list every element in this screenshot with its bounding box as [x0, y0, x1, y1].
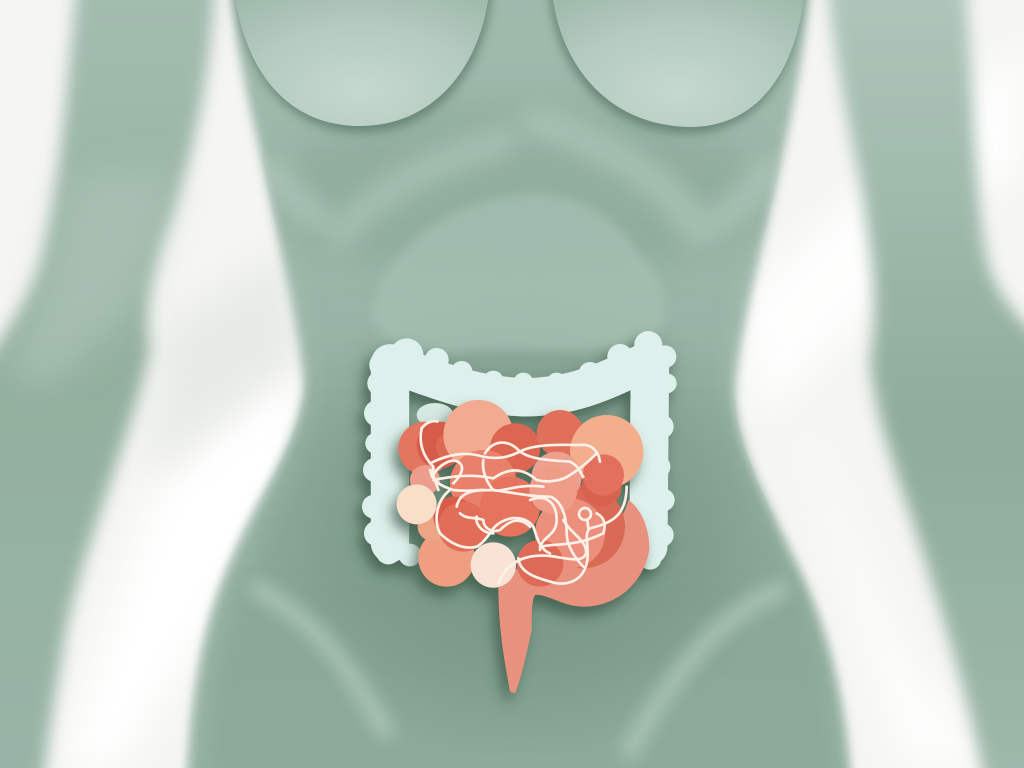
pale loop behind intestine: [417, 403, 453, 427]
left breast: [233, 0, 492, 132]
torso edge shading: [192, 484, 278, 768]
small intestine: organ masses: [397, 400, 649, 693]
torso: [181, 0, 856, 768]
small intestine: white thread: [421, 421, 627, 584]
left arm shading: [10, 170, 175, 385]
right arm: [826, 0, 1024, 768]
right breast: [549, 0, 806, 133]
liver light shape: [372, 194, 666, 353]
left arm: [0, 0, 216, 768]
groin highlights: [258, 590, 385, 730]
colon: large intestine: [362, 331, 677, 570]
rib arcs: [340, 140, 505, 235]
base pouch and rectum: [498, 500, 649, 693]
abdomen shadow around organs: [281, 348, 766, 708]
digestive system: [362, 331, 677, 693]
